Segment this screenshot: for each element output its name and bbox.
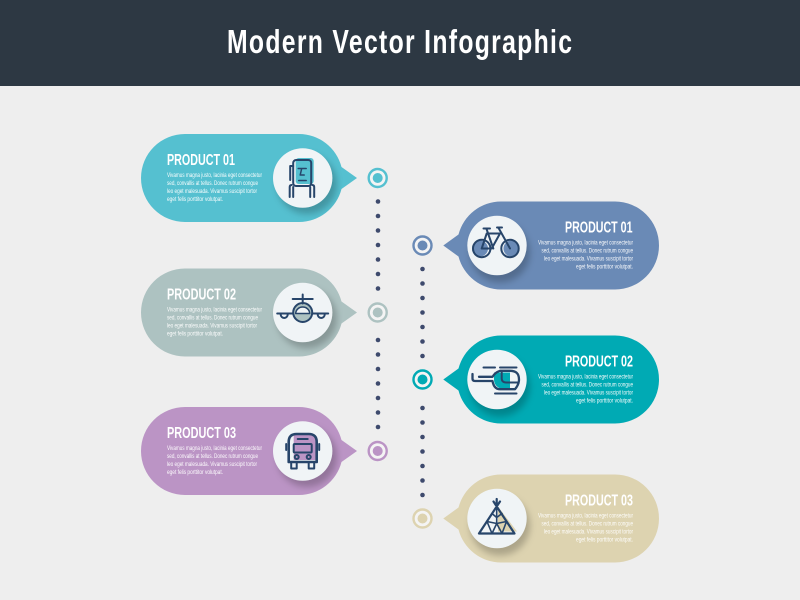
- icon disc: [467, 216, 527, 275]
- timeline marker: [369, 304, 387, 322]
- panel: left product 02: [141, 268, 387, 356]
- heading: PRODUCT 01: [565, 220, 633, 236]
- icon disc: [467, 350, 527, 409]
- circle shadow: [277, 427, 337, 487]
- callout shape: [141, 134, 357, 222]
- timeline marker: [414, 370, 432, 388]
- body text: [167, 172, 262, 203]
- heading: PRODUCT 02: [167, 286, 236, 304]
- icon disc: [273, 283, 332, 342]
- body text: [167, 306, 262, 338]
- callout shape: [141, 268, 357, 356]
- timeline marker: [414, 510, 432, 528]
- body text: Vivamus magna justo, lacinia eget consectetur: [538, 512, 633, 520]
- body text: Vivamus magna justo, lacinia eget consectetur: [538, 374, 633, 380]
- circle shadow: [277, 288, 337, 348]
- body text: leo eget malesuada. Vivamus suscipit tortor: [167, 188, 257, 195]
- panel: right product 02: [414, 336, 659, 424]
- body text: [167, 445, 262, 476]
- title: Modern Vector Infographic: [227, 25, 572, 61]
- body text: sed, convallis at tellus. Donec rutrum congue: [167, 180, 258, 187]
- body text: [538, 512, 633, 544]
- body text: Vivamus magna justo, lacinia eget consectetur: [538, 240, 633, 246]
- icon disc: [273, 421, 332, 481]
- callout shape: [443, 202, 659, 290]
- body text: eget felis porttitor volutpat.: [576, 398, 633, 404]
- body text: leo eget malesuada. Vivamus suscipit tortor: [167, 322, 257, 330]
- callout shape: [443, 336, 659, 424]
- circle shadow: [470, 222, 530, 282]
- timeline marker: [369, 442, 387, 460]
- icon disc: [467, 489, 527, 548]
- panel: right product 01: [414, 202, 659, 290]
- panel: right product 03: [414, 474, 659, 562]
- body text: Vivamus magna justo, lacinia eget consectetur: [167, 306, 262, 314]
- body text: leo eget malesuada. Vivamus suscipit tortor: [544, 528, 633, 536]
- icon: bicycle: [472, 228, 520, 257]
- icon: airplane: [277, 294, 328, 322]
- panel: left product 01: [141, 134, 387, 222]
- body text: Vivamus magna justo, lacinia eget consectetur: [167, 172, 262, 179]
- header band: [0, 0, 800, 86]
- dotted connector: left timeline: [376, 199, 380, 429]
- body text: leo eget malesuada. Vivamus suscipit tortor: [167, 461, 257, 468]
- body text: sed, convallis at tellus. Donec rutrum congue: [167, 453, 258, 460]
- heading: PRODUCT 01: [167, 152, 235, 169]
- icon: moai statue: [290, 158, 314, 197]
- body text: sed, convallis at tellus. Donec rutrum congue: [542, 382, 633, 388]
- circle shadow: [470, 496, 530, 556]
- icon disc: [273, 148, 332, 208]
- circle shadow: [470, 356, 530, 416]
- body text: leo eget malesuada. Vivamus suscipit tortor: [544, 256, 633, 262]
- timeline marker: [414, 236, 432, 254]
- callout shape: [141, 407, 357, 495]
- body text: sed, convallis at tellus. Donec rutrum congue: [542, 520, 633, 528]
- body text: leo eget malesuada. Vivamus suscipit tortor: [544, 390, 633, 396]
- panel: left product 03: [141, 407, 387, 495]
- icon: helicopter: [472, 368, 519, 394]
- body text: eget felis porttitor volutpat.: [576, 264, 633, 270]
- dotted connector: right timeline: [420, 267, 425, 497]
- body text: sed, convallis at tellus. Donec rutrum congue: [167, 314, 258, 322]
- icon: tipi tent: [479, 499, 517, 534]
- body text: sed, convallis at tellus. Donec rutrum congue: [542, 248, 633, 254]
- body text: eget felis porttitor volutpat.: [167, 196, 223, 203]
- body text: eget felis porttitor volutpat.: [167, 330, 223, 338]
- body text: [538, 240, 633, 270]
- heading: PRODUCT 03: [565, 492, 633, 510]
- heading: PRODUCT 03: [167, 425, 236, 442]
- circle shadow: [277, 154, 337, 214]
- callout shape: [443, 474, 659, 562]
- icon: bus: [286, 434, 319, 468]
- timeline marker: [369, 169, 387, 187]
- body text: eget felis porttitor volutpat.: [576, 536, 633, 544]
- body text: [538, 374, 633, 404]
- body text: eget felis porttitor volutpat.: [167, 469, 223, 476]
- body text: Vivamus magna justo, lacinia eget consectetur: [167, 445, 262, 452]
- heading: PRODUCT 02: [565, 354, 633, 370]
